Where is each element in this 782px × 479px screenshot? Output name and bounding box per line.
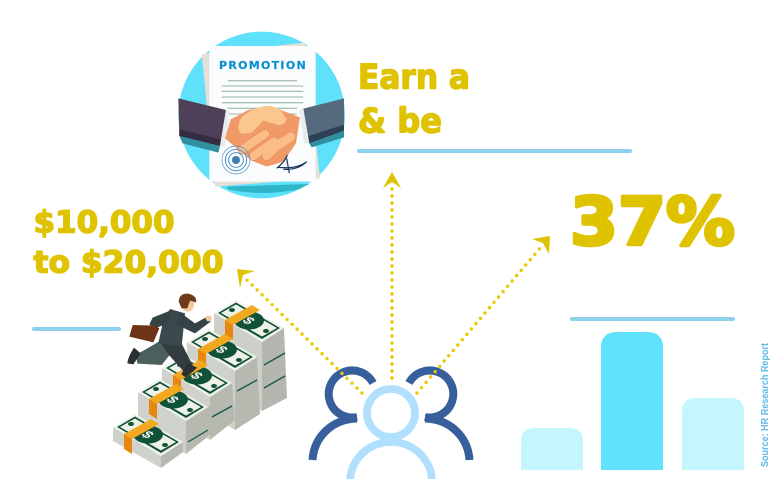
icon: group of people [312, 370, 470, 479]
left back person [312, 370, 373, 460]
percentage figure: 37% [570, 184, 735, 260]
heading: earn a and be: & be [358, 102, 442, 142]
right sleeve [299, 98, 344, 147]
arrow to promotion [383, 172, 401, 378]
promotion document [209, 46, 316, 182]
rule under salary heading [32, 327, 121, 331]
back shoe [127, 348, 141, 364]
seal stamp [222, 146, 250, 174]
teal bottom band [227, 184, 309, 193]
arrow to salary [237, 269, 362, 393]
briefcase [129, 325, 159, 342]
left sleeve [178, 98, 230, 153]
circle background [178, 32, 345, 198]
heading: earn a and be [358, 58, 470, 142]
source note: Source: HR Research Report [759, 343, 771, 467]
bar chart [521, 332, 744, 470]
money stack 5 [214, 300, 287, 411]
heading: earn a and be: Earn a [358, 58, 470, 98]
rule under promotion heading [357, 149, 632, 153]
document lines [222, 81, 303, 114]
front leg [160, 342, 193, 371]
arrows [237, 172, 550, 393]
back leg [136, 340, 175, 365]
money stack 4 [187, 329, 260, 430]
running man [127, 294, 212, 378]
document title: PROMOTION [219, 59, 306, 72]
illustration: money stairs and running man [113, 294, 287, 468]
right back person [409, 370, 470, 460]
money stack 2 [138, 379, 211, 454]
heading: salary amount: to $20,000 [34, 246, 224, 280]
front shoe [181, 364, 197, 378]
heading: salary amount: $10,000 [34, 206, 174, 240]
head [181, 297, 194, 312]
back sheet [202, 43, 320, 187]
money stack 1 [113, 414, 183, 468]
money stack 3 [162, 355, 235, 440]
illustration: promotion handshake [178, 32, 345, 198]
heading: salary amount [34, 206, 224, 280]
signature [277, 155, 307, 173]
hair [179, 294, 196, 308]
torso [158, 309, 185, 347]
arms [149, 310, 211, 333]
handshake [225, 106, 300, 167]
front person [350, 389, 432, 479]
arrow to percentage [417, 236, 550, 393]
rule above bar chart [570, 317, 735, 321]
